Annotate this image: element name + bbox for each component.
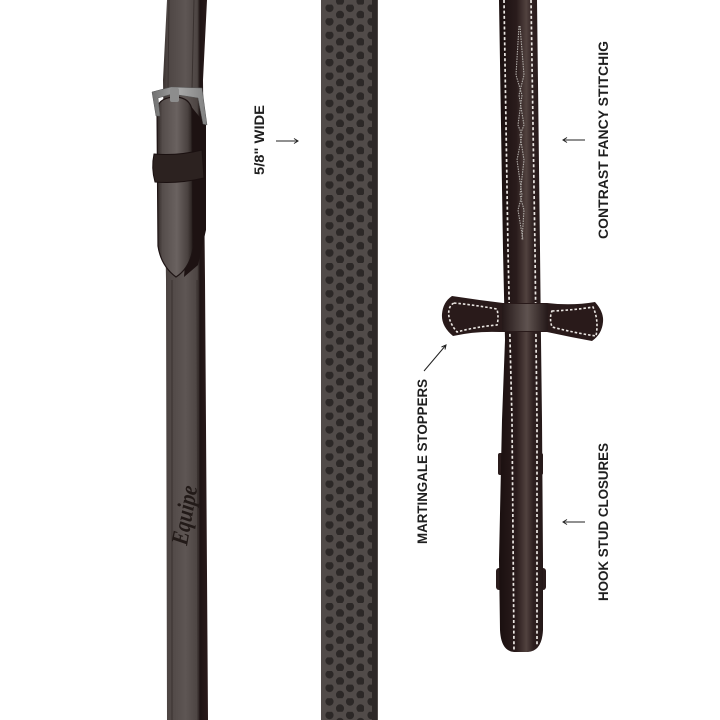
left strap with buckle	[152, 0, 208, 720]
center band	[502, 304, 548, 331]
dark edge	[372, 0, 377, 720]
fancy stitching	[516, 26, 523, 240]
brand logo: Equipe	[167, 483, 203, 548]
keeper loop	[153, 150, 204, 182]
dark shadow behind tab	[184, 105, 206, 277]
arrow: 5/8 inch wide	[276, 138, 298, 144]
martingale stoppers	[442, 296, 603, 341]
label: martingale stoppers: MARTINGALE STOPPERS	[415, 379, 430, 544]
lower hook stud keepers	[498, 453, 543, 475]
center rein with rubber grip	[321, 0, 378, 720]
strap body	[163, 0, 208, 720]
buckle tab	[157, 97, 193, 277]
rein body	[321, 0, 378, 720]
label: hook stud closures: HOOK STUD CLOSURES	[596, 443, 611, 601]
arrow: hook stud closures	[563, 520, 585, 524]
arrow: contrast fancy stitching	[563, 138, 585, 142]
label: 5/8 inch wide: 5/8" WIDE	[252, 105, 267, 175]
left stopper stitching	[449, 303, 498, 332]
arrow: martingale stoppers	[424, 345, 446, 371]
right stopper stitching	[550, 307, 597, 336]
outer stitching	[504, 0, 514, 650]
buckle	[152, 87, 207, 125]
label: contrast fancy stitching: CONTRAST FANCY STITCHIG	[596, 41, 611, 239]
strap crease lines	[168, 0, 198, 720]
right rein with stitching	[442, 0, 603, 652]
rein body	[499, 0, 543, 652]
grip dots	[323, 0, 372, 720]
buckle tongue	[170, 88, 179, 102]
stopper body	[442, 296, 603, 341]
